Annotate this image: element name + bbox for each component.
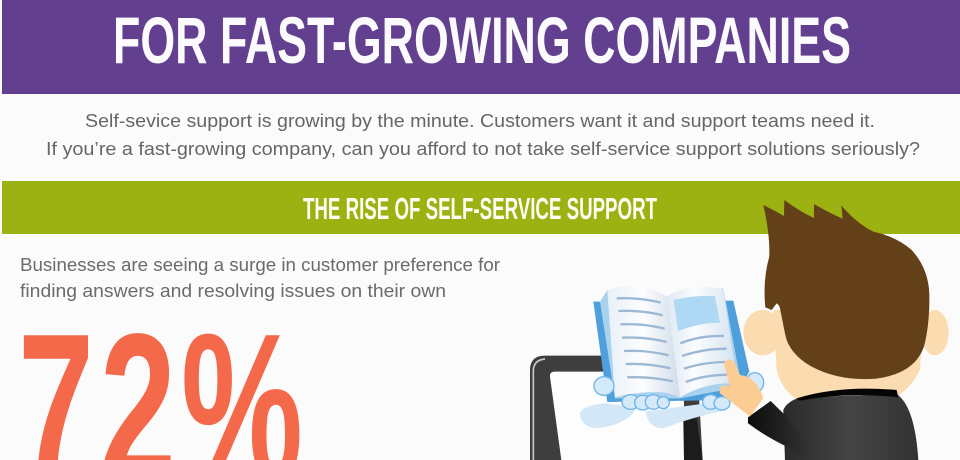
icon: gloved left hand xyxy=(594,373,764,410)
intro text: Self-sevice support is growing by the minute. Customers want it and support teams need it. xyxy=(85,111,875,131)
icon: left ear xyxy=(743,310,782,355)
icon: tablet xyxy=(530,356,703,460)
icon: book xyxy=(580,286,764,428)
body text: finding answers and resolving issues on their own xyxy=(20,280,446,301)
icon: pointing hand xyxy=(720,360,763,417)
icon: suit xyxy=(748,389,918,460)
body text xyxy=(20,254,500,301)
intro text xyxy=(46,111,920,159)
body text: Businesses are seeing a surge in customer preference for xyxy=(20,254,500,275)
icon: right ear xyxy=(921,310,949,355)
icon: hair xyxy=(763,200,929,379)
intro text: If you’re a fast-growing company, can you afford to not take self-service support solutions seriously? xyxy=(46,139,920,159)
title banner xyxy=(2,0,960,94)
section heading: THE RISE OF SELF-SERVICE SUPPORT xyxy=(303,191,657,226)
icon: face and neck xyxy=(773,310,923,399)
section banner xyxy=(2,181,960,234)
big statistic xyxy=(18,291,303,460)
illustration: person reading a book beside a tablet xyxy=(530,200,949,460)
